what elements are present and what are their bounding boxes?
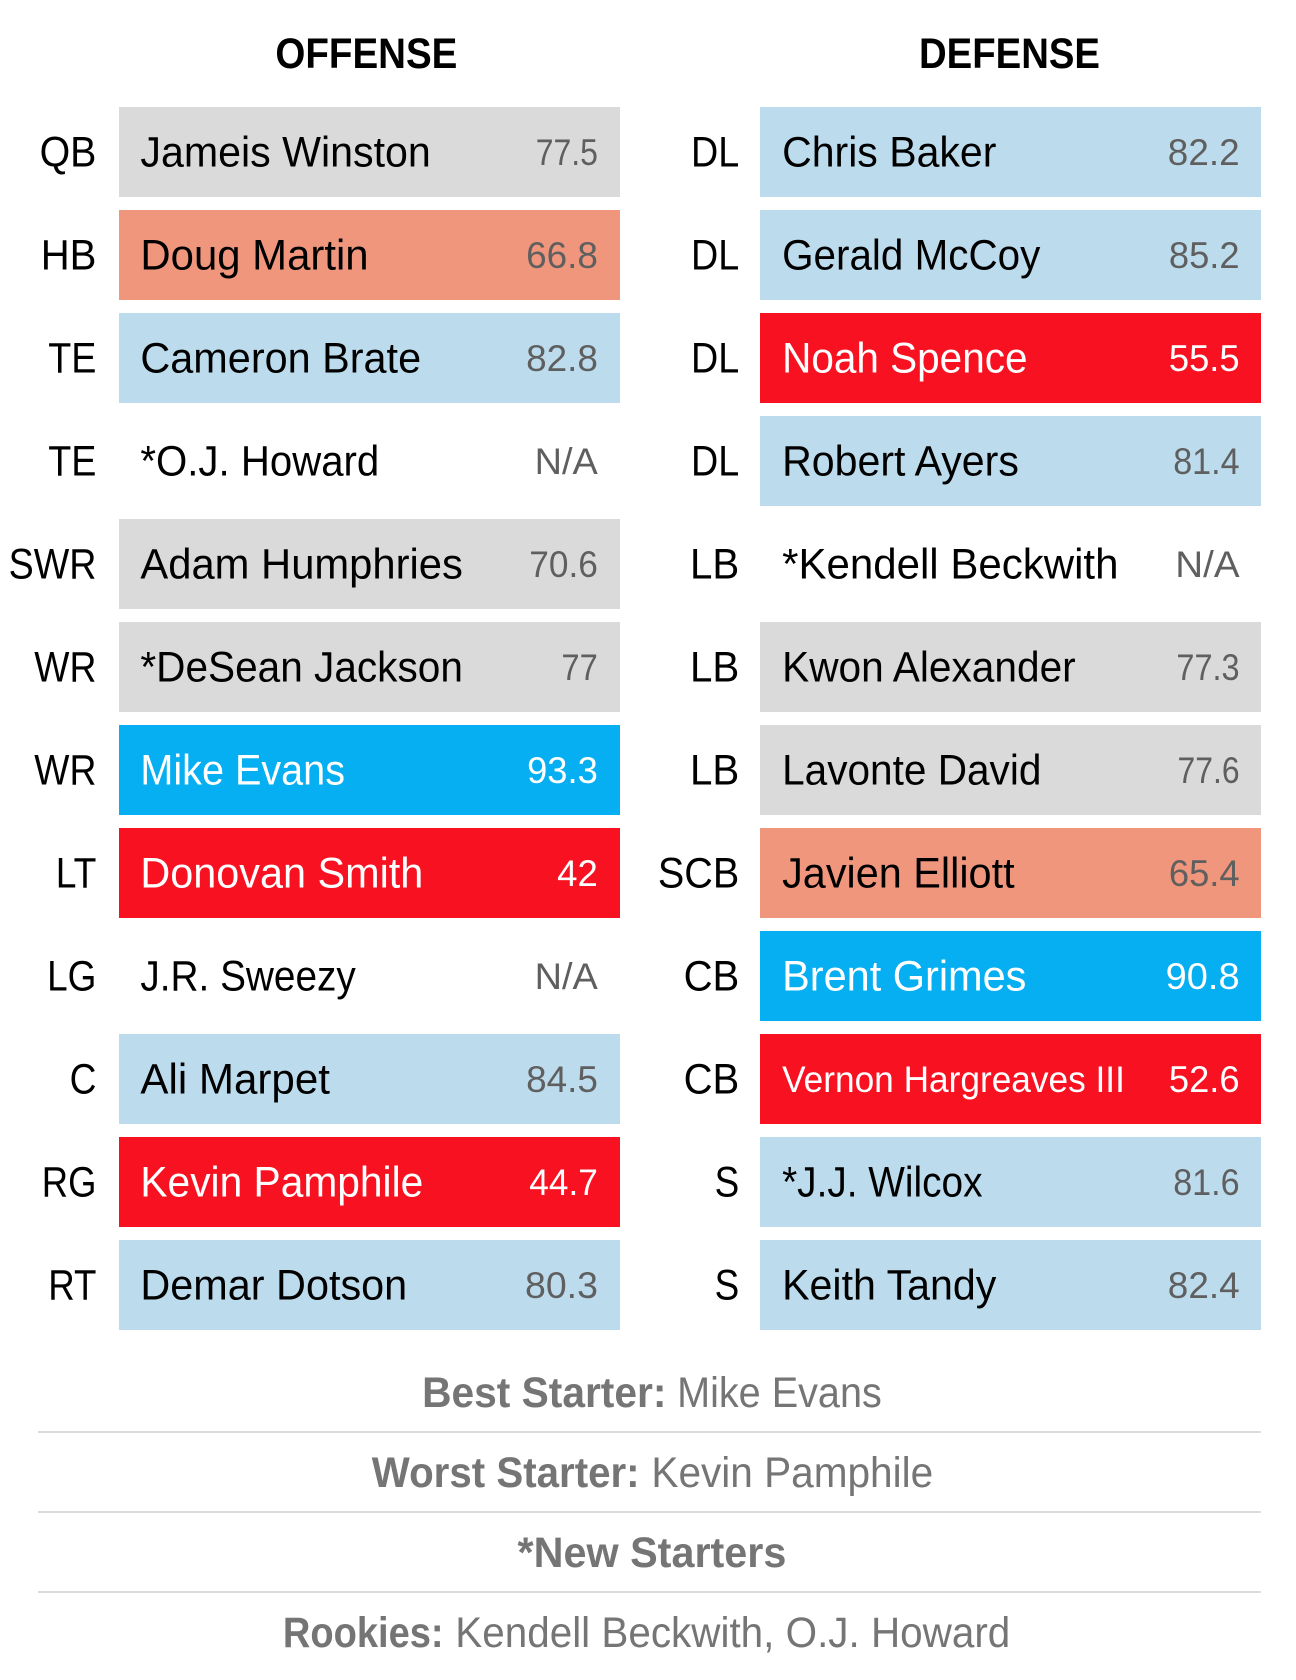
text: worst starter	[372, 1449, 933, 1497]
row: LB Lavonte David: 77.6	[1178, 750, 1240, 791]
row: TE Cameron Brate	[48, 313, 620, 403]
row: DL Chris Baker	[691, 107, 1261, 197]
row: LG J.R. Sweezy: J.R. Sweezy	[140, 952, 356, 1000]
row: C Ali Marpet: C	[70, 1056, 96, 1104]
row: RG Kevin Pamphile	[42, 1137, 620, 1227]
row: DL Gerald McCoy: Gerald McCoy	[782, 232, 1041, 280]
row: CB Brent Grimes: 90.8	[1166, 956, 1240, 997]
row: HB Doug Martin: Doug Martin	[140, 232, 369, 280]
row: LB Kendell Beckwith: N/A	[1175, 544, 1240, 585]
row: TE O.J. Howard: *O.J. Howard	[140, 438, 379, 486]
row: C Ali Marpet: Ali Marpet	[140, 1056, 330, 1104]
row: DL Gerald McCoy: DL	[691, 232, 739, 280]
row: SCB Javien Elliott: SCB	[658, 850, 739, 898]
row: WR Mike Evans	[34, 725, 620, 815]
row: HB Doug Martin: HB	[41, 232, 96, 280]
row: WR DeSean Jackson: 77	[561, 647, 598, 688]
panel: summary notes	[38, 1369, 1261, 1657]
row: SWR Adam Humphries: SWR	[9, 540, 96, 588]
row: WR Mike Evans: 93.3	[527, 750, 598, 791]
row: SCB Javien Elliott	[658, 828, 1261, 918]
row: C Ali Marpet	[70, 1034, 620, 1124]
row: WR Mike Evans: WR	[34, 746, 96, 794]
heading: offense: OFFENSE	[275, 30, 457, 78]
row: DL Robert Ayers	[691, 416, 1261, 506]
row: TE Cameron Brate: Cameron Brate	[140, 334, 421, 382]
row: CB Brent Grimes	[684, 931, 1261, 1021]
row: WR DeSean Jackson: *DeSean Jackson	[140, 644, 463, 692]
row: LT Donovan Smith: Donovan Smith	[140, 850, 423, 898]
row: DL Chris Baker: Chris Baker	[782, 128, 996, 176]
row: S J.J. Wilcox: *J.J. Wilcox	[782, 1158, 983, 1206]
row: S Keith Tandy: 82.4	[1168, 1265, 1240, 1306]
row: TE O.J. Howard: TE	[48, 438, 96, 486]
row: S J.J. Wilcox: S	[715, 1158, 739, 1206]
row: WR DeSean Jackson: WR	[34, 644, 96, 692]
row: CB Vernon Hargreaves III	[684, 1034, 1261, 1124]
text: new starters note: *New Starters	[518, 1529, 786, 1577]
row: LB Kwon Alexander: LB	[690, 644, 739, 692]
row: DL Noah Spence: Noah Spence	[782, 334, 1028, 382]
row: DL Noah Spence: DL	[691, 334, 739, 382]
row: HB Doug Martin	[41, 210, 620, 300]
text: worst starter: Worst Starter:	[372, 1449, 640, 1497]
row: S Keith Tandy: Keith Tandy	[782, 1262, 997, 1310]
row: S Keith Tandy	[715, 1240, 1261, 1330]
row: DL Robert Ayers: Robert Ayers	[782, 438, 1019, 486]
row: CB Brent Grimes: Brent Grimes	[782, 952, 1026, 1000]
text: worst starter: Kevin Pamphile	[651, 1449, 933, 1497]
row: LB Kwon Alexander: 77.3	[1176, 647, 1240, 688]
row: RG Kevin Pamphile: Kevin Pamphile	[140, 1158, 423, 1206]
row: DL Noah Spence	[691, 313, 1261, 403]
panel: offense roster	[9, 107, 620, 1330]
row: TE O.J. Howard: N/A	[535, 441, 598, 482]
row: QB Jameis Winston: 77.5	[536, 132, 598, 173]
row: QB Jameis Winston: QB	[40, 128, 96, 176]
row: DL Noah Spence: 55.5	[1169, 338, 1240, 379]
row: LT Donovan Smith: LT	[56, 850, 96, 898]
row: RT Demar Dotson	[48, 1240, 620, 1330]
row: LG J.R. Sweezy: N/A	[535, 956, 598, 997]
row: CB Brent Grimes: CB	[684, 952, 739, 1000]
row: TE Cameron Brate: TE	[48, 334, 96, 382]
row: RG Kevin Pamphile: 44.7	[529, 1162, 598, 1203]
row: CB Vernon Hargreaves III: CB	[684, 1056, 739, 1104]
row: WR DeSean Jackson	[34, 622, 620, 712]
row: LB Lavonte David: Lavonte David	[782, 746, 1041, 794]
row: RT Demar Dotson: 80.3	[525, 1265, 598, 1306]
row: TE O.J. Howard	[48, 438, 598, 486]
row: SCB Javien Elliott: 65.4	[1169, 853, 1240, 894]
text: best starter	[422, 1369, 882, 1417]
row: LB Kwon Alexander	[690, 622, 1261, 712]
heading: defense: DEFENSE	[919, 30, 1100, 78]
row: RG Kevin Pamphile: RG	[42, 1158, 96, 1206]
panel: defense roster	[658, 107, 1261, 1330]
row: WR Mike Evans: Mike Evans	[140, 746, 345, 794]
row: SWR Adam Humphries	[9, 519, 620, 609]
row: S J.J. Wilcox	[715, 1137, 1261, 1227]
row: SWR Adam Humphries: 70.6	[529, 544, 598, 585]
text: best starter: Mike Evans	[677, 1369, 882, 1417]
row: LB Lavonte David	[690, 725, 1261, 815]
row: LG J.R. Sweezy: LG	[47, 952, 96, 1000]
row: LB Kwon Alexander: Kwon Alexander	[782, 644, 1076, 692]
text: rookies: Kendell Beckwith, O.J. Howard	[455, 1609, 1010, 1657]
row: TE Cameron Brate: 82.8	[526, 338, 598, 379]
row: C Ali Marpet: 84.5	[526, 1059, 598, 1100]
row: S Keith Tandy: S	[715, 1262, 739, 1310]
row: S J.J. Wilcox: 81.6	[1173, 1162, 1240, 1203]
row: CB Vernon Hargreaves III: Vernon Hargreaves III	[782, 1059, 1125, 1100]
row: LB Lavonte David: LB	[690, 746, 739, 794]
row: LB Kendell Beckwith: LB	[690, 540, 739, 588]
row: SCB Javien Elliott: Javien Elliott	[782, 850, 1015, 898]
row: LB Kendell Beckwith	[690, 540, 1240, 588]
row: DL Gerald McCoy	[691, 210, 1261, 300]
row: RT Demar Dotson: RT	[48, 1262, 96, 1310]
row: LB Kendell Beckwith: *Kendell Beckwith	[782, 540, 1118, 588]
row: CB Vernon Hargreaves III: 52.6	[1169, 1059, 1240, 1100]
row: LG J.R. Sweezy	[47, 952, 598, 1000]
row: LT Donovan Smith	[56, 828, 620, 918]
row: SWR Adam Humphries: Adam Humphries	[140, 540, 463, 588]
text: rookies: Rookies:	[283, 1609, 444, 1657]
row: DL Gerald McCoy: 85.2	[1169, 235, 1240, 276]
row: QB Jameis Winston: Jameis Winston	[140, 128, 431, 176]
row: DL Robert Ayers: 81.4	[1173, 441, 1240, 482]
row: LT Donovan Smith: 42	[557, 853, 598, 894]
text: best starter: Best Starter:	[422, 1369, 666, 1417]
row: DL Chris Baker: 82.2	[1168, 132, 1240, 173]
row: DL Robert Ayers: DL	[691, 438, 739, 486]
row: DL Chris Baker: DL	[691, 128, 739, 176]
row: RT Demar Dotson: Demar Dotson	[140, 1262, 407, 1310]
row: QB Jameis Winston	[40, 107, 620, 197]
row: HB Doug Martin: 66.8	[526, 235, 598, 276]
